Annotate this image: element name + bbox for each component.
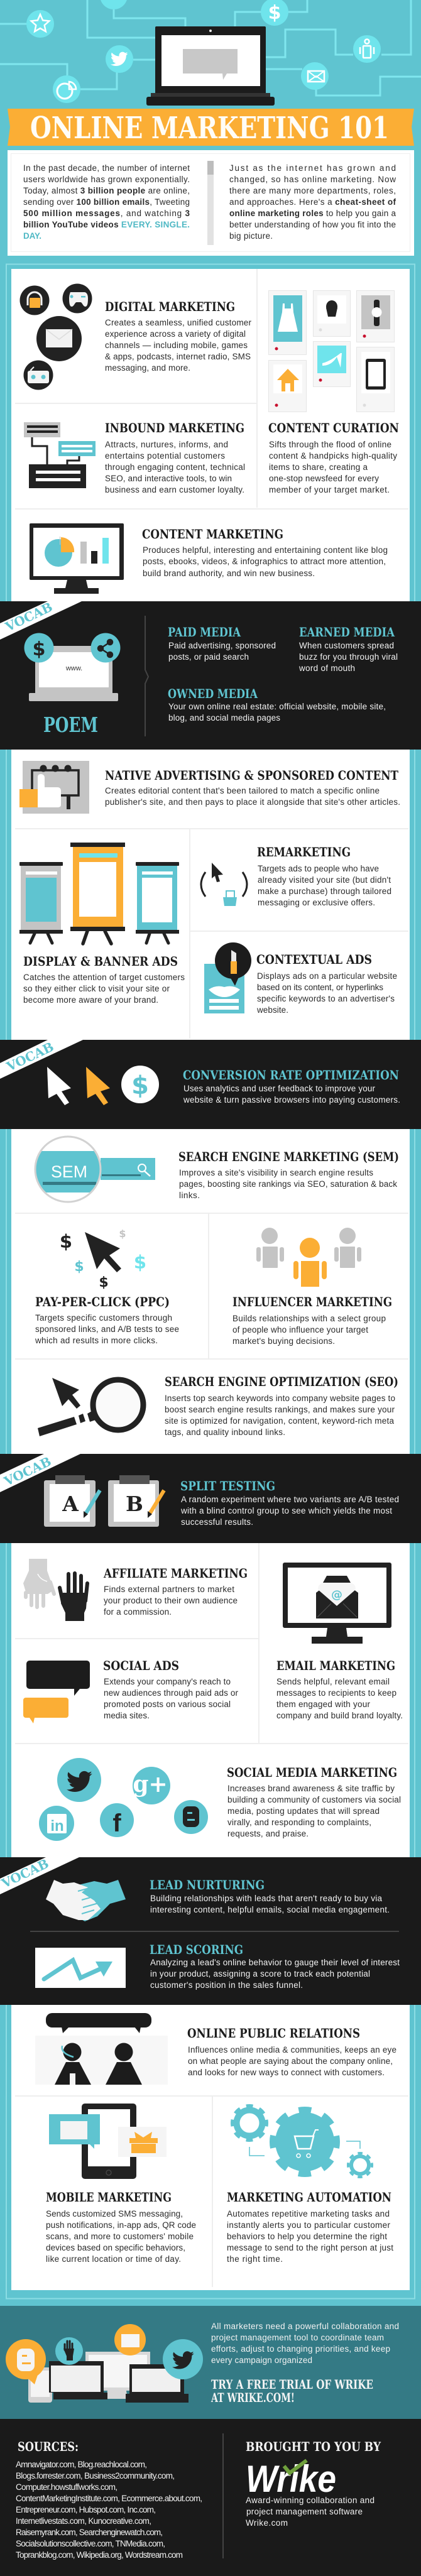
body text: virally, and responding to complaints, [227, 1818, 371, 1827]
body text: project management tool to coordinate team [211, 2333, 384, 2342]
body text: efforts, adjust to changing priorities, and keep [211, 2344, 390, 2354]
body text [46, 2209, 196, 2264]
vocab ribbon [0, 1454, 80, 1492]
footer [0, 2419, 421, 2576]
call to action heading: TRY A FREE TRIAL OF WRIKE [211, 2377, 373, 2392]
brought to you by: Award-winning collaboration and [246, 2496, 375, 2505]
term: lead nurturing: LEAD NURTURING [150, 1878, 265, 1892]
sources: Internetlivestats.com, Kunocreative.com, [16, 2516, 151, 2526]
body text [35, 1313, 179, 1345]
body text [227, 1784, 401, 1838]
icon: pie chart [53, 75, 80, 103]
body text: experience across a variety of digital [105, 329, 246, 339]
icon: white cursor [47, 1067, 71, 1105]
body text [269, 440, 397, 494]
heading: REMARKETING [257, 845, 351, 860]
icon: rising graph [35, 1948, 126, 1988]
body text [211, 2322, 399, 2365]
icon: people [256, 1228, 361, 1287]
intro left text: 500 million messages, and watching 3 [23, 209, 190, 218]
body text: Creates a seamless, unified customer [105, 318, 251, 327]
body text: message to send to the right person at just [227, 2243, 393, 2252]
body text: so they either click to visit your site or [23, 984, 170, 993]
sources [16, 2440, 202, 2560]
panel: email marketing [276, 1563, 403, 1720]
intro left text: billion YouTube videos EVERY. SINGLE. [23, 220, 190, 229]
body text: media, posting updates that will spread [227, 1806, 380, 1816]
body text: Catches the attention of target customers [23, 973, 185, 982]
card: house [269, 361, 307, 412]
intro right text: there are many more departments, roles, [229, 186, 396, 195]
body text: entertains potential customers [105, 451, 225, 461]
body text: SEO, and interactive tools, to win [105, 474, 232, 483]
body text [227, 2209, 393, 2264]
panel: display and banner ads [19, 843, 185, 1005]
body text: A random experiment where two variants are A/B tested [181, 1495, 399, 1504]
icon: devices with social bubbles [6, 2324, 203, 2403]
icon: dollar: $ [268, 2, 281, 24]
sources: Socialsolutionscollective.com, TNMedia.com, [16, 2539, 165, 2548]
icon: mail [301, 62, 329, 90]
card: shoe [313, 342, 351, 387]
body text: Influences online media & communities, keeps an eye [188, 2045, 396, 2055]
body text: behaviors to help you determine the right [227, 2232, 387, 2241]
hero: circuit network and laptop [0, 0, 421, 106]
term: paid media: PAID MEDIA [168, 625, 241, 640]
body text: website & turn passive browsers into paying customers. [183, 1095, 400, 1105]
body text: new audiences through paid ads or [104, 1688, 239, 1698]
term: lead nurturing [150, 1878, 390, 1914]
heading: EMAIL MARKETING [276, 1659, 395, 1673]
intro right text: Just as the internet has grown and [229, 163, 396, 173]
heading: INBOUND MARKETING [105, 421, 244, 435]
term: lead nurturing: Building relationships with leads that aren't ready to buy via [150, 1894, 382, 1903]
body text: which ad results in more clicks. [35, 1336, 158, 1345]
intro divider [207, 161, 214, 245]
body text [180, 1495, 399, 1527]
body text [105, 786, 400, 807]
icon: monitor with envelope: @ [331, 1588, 342, 1602]
body text: tags, and quality inbound links. [165, 1427, 285, 1437]
body text: Creates editorial content that's been tailored to match a specific online [105, 786, 380, 795]
icon: laptop with dollar and share: $ [33, 638, 45, 660]
icon: person [353, 35, 381, 63]
body text: successful results. [181, 1517, 253, 1527]
panel: marketing automation [227, 2106, 393, 2264]
icon: twitter [106, 45, 133, 73]
body text: & apps, podcasts, internet radio, SMS [105, 352, 251, 361]
icon: orange cursor [86, 1067, 110, 1105]
body text: member of your target market. [269, 485, 390, 494]
term: earned media: word of mouth [298, 663, 355, 673]
intro right text [229, 163, 396, 241]
icon: clipboard B: B [126, 1492, 143, 1516]
body text: business and earn customer loyalty. [105, 485, 244, 494]
body text: them engaged with your [276, 1700, 371, 1709]
body text: Produces helpful, interesting and entertaining content like blog [143, 545, 388, 555]
panel: remarketing [201, 845, 391, 907]
body text: website. [256, 1005, 288, 1015]
panel: vocab conversion rate optimization [0, 1039, 421, 1129]
icon: gears and cart [232, 2106, 372, 2177]
body text: scans, and more to customers' mobile [46, 2232, 194, 2241]
term: owned media [168, 687, 386, 723]
body text: messaging or exclusive offers. [258, 898, 375, 907]
intro left text: users worldwide has grown exponentially. [23, 175, 190, 184]
term: paid media [168, 625, 276, 662]
body text: every campaign organized [211, 2355, 312, 2365]
sources: Amnavigator.com, Blog.reachlocal.com, [16, 2460, 147, 2469]
body text: Inserts top search keywords into company website pages to [165, 1394, 395, 1403]
body text: Improves a site's visibility in search engine results [179, 1168, 373, 1177]
body text [258, 864, 391, 907]
icon: cursor and dollars: $ [60, 1231, 72, 1252]
icon: handshake [46, 1880, 126, 1921]
brought to you by [246, 2440, 381, 2528]
vocab ribbon [0, 599, 82, 640]
icon: social circles: g+ [133, 1771, 168, 1798]
intro left text: sending over 100 billion emails, Tweeting [23, 197, 190, 207]
heading: MARKETING AUTOMATION [227, 2190, 391, 2205]
intro left text: Today, almost 3 billion people are online, [23, 186, 190, 195]
sources: Entrepreneur.com, Hubspot.com, Inc.com, [16, 2505, 156, 2514]
icon: dollar circle [121, 1066, 159, 1103]
heading: SPLIT TESTING [180, 1479, 275, 1493]
body text: become more aware of your brand. [23, 995, 158, 1005]
body text: Displays ads on a particular website [257, 971, 397, 981]
body text: Automates repetitive marketing tasks and [227, 2209, 390, 2219]
term: lead scoring: Analyzing a lead's online behavior to gauge their level of interest [150, 1958, 400, 1967]
sources: SOURCES: [18, 2440, 79, 2454]
term: earned media: When customers spread [299, 641, 394, 650]
card: dress [269, 290, 307, 354]
body text: Targets specific customers through [35, 1313, 172, 1323]
intro right text: better understanding of how you fit into the [229, 220, 396, 229]
term: owned media: OWNED MEDIA [168, 687, 258, 701]
icon: people talking [35, 2013, 168, 2085]
body text: publisher's site, and then pays to place it alongside that site's other articles. [105, 797, 400, 807]
body text: through engaging content, technical [105, 462, 245, 472]
body text: building a community of customers via social [227, 1795, 401, 1804]
heading: MOBILE MARKETING [46, 2190, 172, 2205]
vocab ribbon [0, 1856, 79, 1894]
body text [143, 545, 388, 578]
panel: content curation cards [269, 290, 395, 412]
body text: build brand authority, and win new business. [143, 569, 315, 578]
term: paid media: posts, or paid search [168, 652, 249, 662]
panel: contextual ads [204, 942, 397, 1015]
body text: like current location or time of day. [46, 2254, 181, 2264]
icon: dollar circle: $ [131, 1071, 149, 1100]
body text: Targets ads to people who have [258, 864, 379, 873]
body text: and looks for new ways to connect with customers. [188, 2068, 385, 2077]
body text: promoted posts on various social [104, 1700, 231, 1709]
body text: based on its content, or hyperlinks [257, 983, 383, 992]
body text: Sends helpful, relevant email [276, 1677, 390, 1686]
sources: Computer.howstuffworks.com, [16, 2482, 118, 2492]
body text: Sifts through the flood of online [269, 440, 391, 449]
icon: SEM magnifier: SEM [51, 1162, 87, 1181]
panel: influencer marketing [232, 1228, 392, 1346]
body text [104, 1585, 238, 1617]
body text: posts, ebooks, videos, & infographics to attract more attention, [143, 557, 386, 566]
heading: SOCIAL ADS [103, 1659, 179, 1673]
panel: online public relations [35, 2013, 396, 2085]
body text [188, 2045, 396, 2077]
icon: laptop with dollar and share: www. [65, 665, 82, 672]
term: earned media: buzz for you through viral [299, 652, 398, 662]
panel: social ads [23, 1659, 239, 1723]
sources: ContentMarketingInstitute.com, Ecommerce.about.com, [16, 2494, 202, 2503]
body text: Extends your company's reach to [104, 1677, 231, 1686]
icon: top node [100, 0, 128, 9]
term: paid media: Paid advertising, sponsored [168, 641, 276, 650]
divider with chevron [145, 616, 148, 736]
body text: Attracts, nurtures, informs, and [105, 440, 228, 449]
icon: SEM magnifier [35, 1137, 155, 1202]
body text: messaging, and more. [105, 363, 190, 373]
body text [104, 1677, 239, 1720]
panel: digital marketing [20, 284, 251, 390]
panel: vocab lead nurturing and lead scoring [0, 1856, 421, 2005]
wrike logo: Wrike [246, 2458, 336, 2500]
body text [256, 971, 397, 1015]
body text: messages to recipients to keep [276, 1688, 396, 1698]
heading: CONTENT CURATION [268, 421, 399, 435]
vocab ribbon [0, 1039, 83, 1079]
body text [179, 1168, 397, 1200]
icon: dollar [261, 0, 288, 26]
body text: pages, boosting site rankings via SEO, saturation & back [179, 1179, 397, 1189]
intro right text: changed, so has online marketing. Now [229, 175, 396, 184]
body text: of people who influence your target [232, 1325, 368, 1334]
icon: hands [23, 1559, 87, 1621]
body text: boost search engine results rankings, and makes sure your [165, 1405, 395, 1414]
panel: affiliate marketing [23, 1559, 248, 1621]
body text [183, 1084, 400, 1105]
body text: already visited your site (but didn't [258, 875, 391, 885]
sources: Toprankblog.com, Wikipedia.org, Wordstream.com [16, 2550, 183, 2560]
intro right text: and approaches. Here's a cheat-sheet of [229, 197, 396, 207]
body text [165, 1394, 395, 1437]
heading: DISPLAY & BANNER ADS [23, 954, 178, 969]
icon: billboard thumb [19, 761, 89, 814]
panel: wrike call to action [0, 2306, 421, 2419]
term: POEM: POEM [43, 712, 98, 737]
heading: AFFILIATE MARKETING [103, 1566, 248, 1581]
icon: speech bubbles [23, 1661, 90, 1723]
icon: clipboard A [44, 1475, 100, 1527]
card: watch [357, 290, 395, 342]
body text: sponsored links, and A/B tests to see [35, 1324, 179, 1334]
icon: lips and lipstick [204, 942, 251, 1013]
body text: on what people are saying about the company online, [188, 2056, 393, 2066]
intro right text: big picture. [229, 231, 273, 241]
brought to you by: Wrike.com [246, 2518, 288, 2528]
body text: push notifications, in-app ads, QR code [46, 2220, 196, 2230]
term: lead scoring [150, 1943, 400, 1990]
intro left text: In the past decade, the number of internet [23, 163, 190, 173]
panel: native advertising [19, 761, 400, 814]
card: tablet [357, 347, 395, 412]
brought to you by: project management software [246, 2507, 363, 2516]
body text: content & handpicks high-quality [269, 451, 397, 461]
icon: cursor and dollars: $ [134, 1252, 146, 1273]
body text [105, 440, 245, 494]
panel: content curation text [268, 421, 399, 494]
icon: banners [19, 843, 179, 944]
card: cupcake [313, 290, 351, 337]
term: earned media: EARNED MEDIA [299, 625, 395, 640]
term: lead scoring: in your product, assigning a score to track each potential [150, 1969, 370, 1978]
body text: specific keywords to an advertiser's [257, 994, 395, 1003]
panel: mobile marketing [46, 2104, 196, 2264]
term: earned media [298, 625, 398, 673]
term: owned media: blog, and social media pages [168, 713, 280, 723]
panel: inbound marketing [24, 421, 245, 494]
body text: Builds relationships with a select group [232, 1314, 386, 1323]
body text: media sites. [104, 1711, 150, 1720]
panel: search engine optimization [38, 1375, 398, 1437]
body text: links. [179, 1191, 200, 1200]
term: owned media: Your own online real estate: official website, mobile site, [168, 702, 386, 711]
sources: Blogs.forrester.com, Business2community.com, [16, 2471, 175, 2480]
icon: clipboard A: A [62, 1492, 79, 1516]
panel: vocab POEM [0, 599, 421, 750]
panel: content marketing [30, 523, 388, 594]
intro card [8, 150, 414, 256]
icon: cursor and dollars: $ [99, 1275, 109, 1291]
body text: market's buying decisions. [232, 1336, 335, 1346]
icon: inbound terminal [24, 422, 96, 488]
heading: INFLUENCER MARKETING [232, 1295, 392, 1309]
intro left text: DAY. [23, 231, 41, 241]
body text: requests, and praise. [227, 1829, 309, 1838]
body text: items to share, creating a [269, 462, 368, 472]
heading: CONTENT MARKETING [142, 527, 283, 542]
body text: instantly alerts you to particular customer [227, 2220, 391, 2230]
body text: one-stop newsfeed for every [269, 474, 379, 483]
icon: social circles: f [112, 1809, 121, 1837]
vocab ribbon: VOCAB [0, 1856, 51, 1891]
icon: cursor and dollars: $ [74, 1259, 84, 1275]
vocab ribbon: VOCAB [3, 599, 55, 635]
icon: cursor and dollars: $ [119, 1228, 126, 1240]
body text [23, 973, 185, 1005]
body text [232, 1314, 386, 1346]
body text: site is optimized for navigation, content, keyword-rich meta [165, 1416, 394, 1426]
icon: cursor and basket [201, 863, 247, 906]
icon: media circles [20, 284, 92, 390]
call to action heading: AT WRIKE.COM! [210, 2391, 295, 2405]
body text: the right time. [227, 2254, 283, 2264]
body text: Uses analytics and user feedback to improve your [183, 1084, 376, 1093]
icon: clipboard B [108, 1475, 164, 1527]
heading: ONLINE PUBLIC RELATIONS [187, 2026, 360, 2041]
laptop with speech bubble [146, 26, 275, 106]
panel: vocab split testing [0, 1454, 421, 1543]
heading: CONTEXTUAL ADS [256, 952, 372, 967]
body text: make a purchase) through tailored [258, 887, 391, 896]
icon: monitor with charts [30, 523, 124, 594]
panel: pay-per-click [35, 1228, 179, 1345]
icon: cursor and magnifier [38, 1378, 143, 1436]
body text: Increases brand awareness & site traffic by [227, 1784, 395, 1793]
body text: for a commission. [104, 1607, 172, 1617]
body text: Sends customized SMS messaging, [46, 2209, 183, 2219]
main frame [6, 264, 415, 2298]
icon: cursor and dollars [60, 1228, 146, 1291]
vocab ribbon: VOCAB [4, 1039, 56, 1074]
icon: social circles: in [50, 1818, 64, 1835]
panel: social media marketing [39, 1758, 401, 1841]
panel: search engine marketing [35, 1137, 399, 1202]
body text: with a blind control group to see which yields the most [180, 1506, 392, 1515]
heading: DIGITAL MARKETING [105, 300, 235, 314]
icon: social circles [39, 1758, 208, 1841]
icon: monitor with envelope [283, 1563, 391, 1644]
heading: PAY-PER-CLICK (PPC) [35, 1295, 170, 1309]
term: lead scoring: customer's position in the sales funnel. [150, 1980, 303, 1990]
body text: Finds external partners to market [104, 1585, 234, 1594]
term: lead scoring: LEAD SCORING [150, 1943, 243, 1957]
body text: channels — including mobile, games [105, 341, 248, 350]
call to action heading [210, 2377, 373, 2405]
icon: star [26, 10, 54, 38]
brought to you by: BROUGHT TO YOU BY [246, 2440, 381, 2454]
body text: devices based on specific behaviors, [46, 2243, 185, 2252]
term: lead nurturing: interesting content, helpful emails, social media engagement. [150, 1905, 390, 1914]
body text [276, 1677, 403, 1720]
intro left text [23, 163, 190, 241]
vocab ribbon: VOCAB [1, 1454, 53, 1489]
sources: Raisemyrank.com, Searchenginewatch.com, [16, 2528, 163, 2537]
body text: your product to their own audience [104, 1596, 238, 1605]
body text: All marketers need a powerful collaboration and [211, 2322, 399, 2331]
body text [105, 318, 251, 373]
intro right text: online marketing roles to help you gain a [229, 209, 396, 218]
icon: laptop with dollar and share [24, 633, 121, 701]
icon: tablet with message and gift [49, 2104, 167, 2179]
body text: company and build brand loyalty. [276, 1711, 403, 1720]
